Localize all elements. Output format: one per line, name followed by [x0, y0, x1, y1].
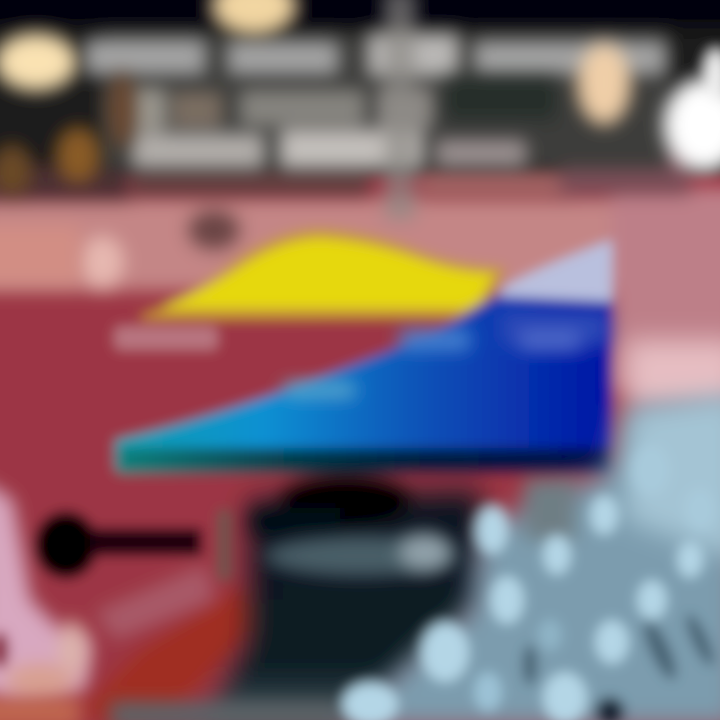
- title line 3: [132, 130, 526, 168]
- black microphone head: [34, 511, 98, 579]
- warm pink left band: [0, 225, 80, 285]
- light: pale pink left: [80, 236, 124, 288]
- light: amber far left: [0, 144, 32, 196]
- chart: layered area chart: [115, 229, 612, 474]
- dark stand and base: [200, 490, 490, 720]
- highlight on ring: [399, 534, 451, 570]
- rose ramp highlight: [95, 565, 215, 640]
- grey floor bottom: [110, 702, 340, 720]
- pale lavender area: [492, 240, 612, 304]
- black microphone handle: [90, 528, 202, 556]
- chart label: left: [114, 326, 218, 350]
- dark spot above yellow shape: [188, 210, 240, 250]
- dark base strip: [118, 448, 612, 474]
- light: amber left: [56, 127, 100, 183]
- black stand shoulder: [250, 508, 340, 534]
- dark blue upper band tint: [500, 310, 610, 346]
- bubbles: [342, 444, 716, 720]
- blue area: [115, 296, 612, 470]
- light: amber column: [108, 72, 136, 148]
- lower scene: [0, 395, 720, 720]
- title line 2: [130, 88, 433, 132]
- grey vertical haze: [525, 480, 575, 540]
- light: top centre: [212, 0, 296, 34]
- vertical light streak behind title: [385, 0, 415, 220]
- title: blurred three-line heading: [85, 34, 665, 168]
- title line 1: [85, 34, 665, 76]
- chart label: right: [520, 330, 580, 350]
- brown edge: [218, 510, 230, 580]
- light pink glow: [58, 622, 86, 678]
- upper right pale zone: [625, 395, 720, 560]
- grey ring on stand: [265, 536, 455, 576]
- chart label: middle: [400, 330, 470, 350]
- black top of stand: [280, 475, 410, 525]
- pink foreground left: [0, 480, 90, 700]
- bokeh lights: [0, 0, 720, 288]
- header haze behind title: [100, 34, 670, 169]
- orange bottom corner: [0, 698, 80, 720]
- yellow area orange fringe: [140, 229, 505, 320]
- yellow area: [165, 239, 494, 308]
- light: right upper streak: [704, 49, 720, 101]
- dark panel right of title: [445, 76, 557, 120]
- dark gaps between bubbles: [523, 612, 718, 720]
- light: right: [578, 44, 630, 124]
- red diagonal ramp: [80, 585, 255, 720]
- light: far right white: [664, 79, 720, 171]
- dark crimson spot: [0, 632, 8, 668]
- blue-grey bubble field: [340, 400, 720, 720]
- peach bottom left: [6, 664, 74, 696]
- chart label: lower: [285, 382, 355, 398]
- light: left: [0, 34, 76, 90]
